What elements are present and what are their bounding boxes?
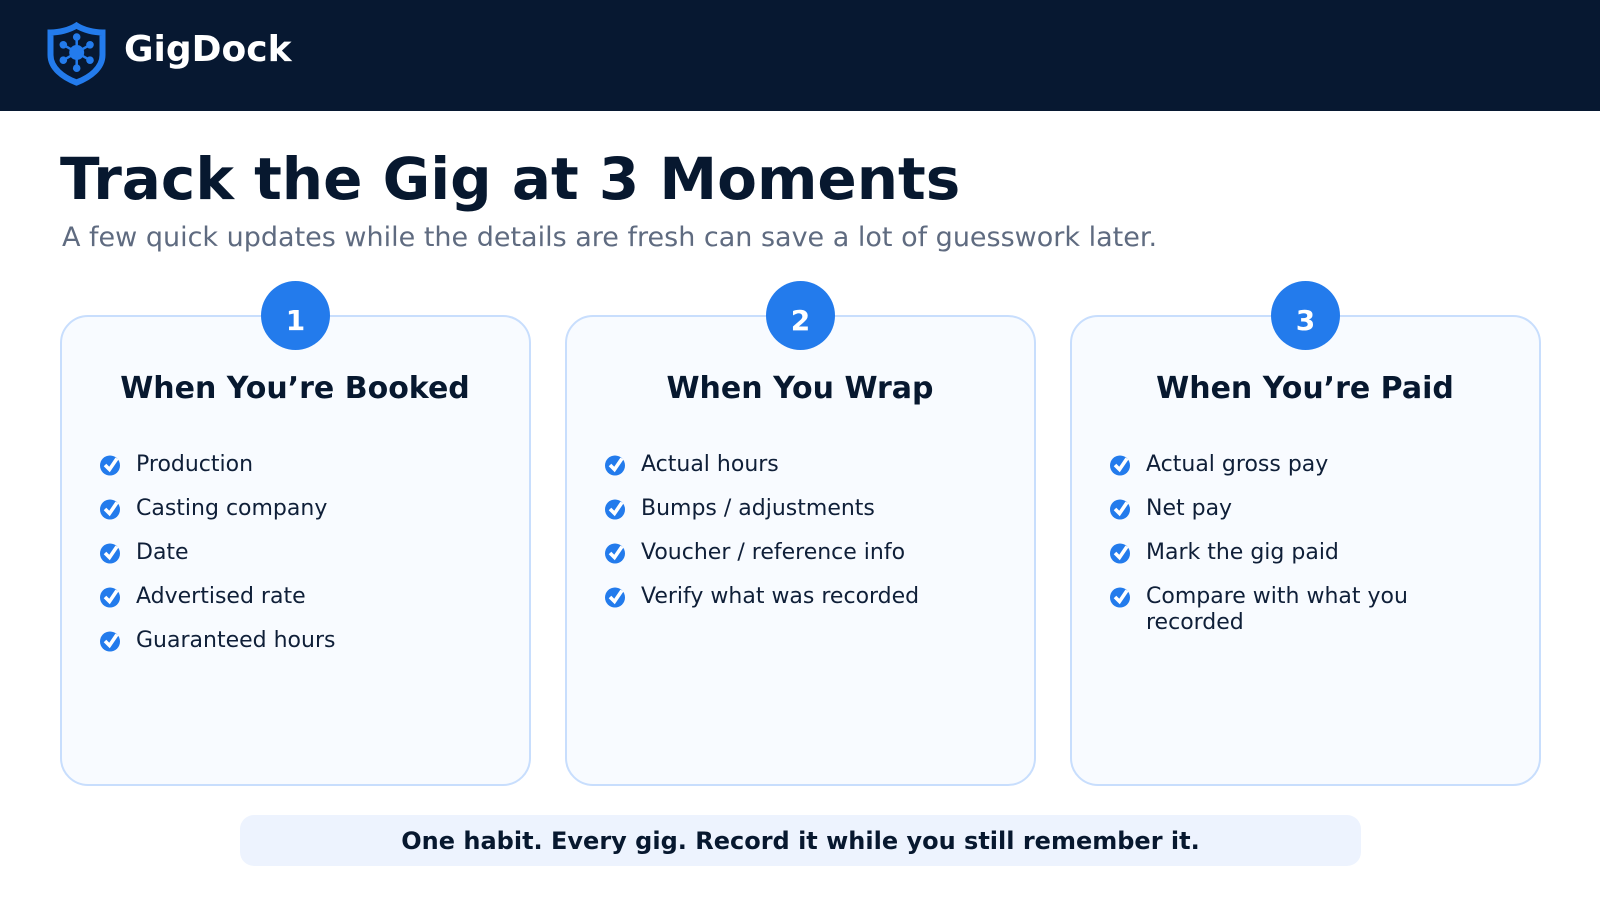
icon: check [605, 588, 625, 608]
icon: check [1110, 544, 1130, 564]
card background [1070, 315, 1541, 786]
item: Casting company [136, 496, 327, 521]
item: Date [136, 540, 189, 565]
item: Actual gross pay [1146, 452, 1328, 477]
step number 1 [261, 281, 330, 350]
header bar [0, 0, 1600, 111]
callout banner [240, 815, 1361, 866]
subtitle: A few quick updates while the details are fresh can save a lot of guesswork later. [62, 222, 1157, 253]
item: recorded [1146, 610, 1244, 635]
card background [60, 315, 531, 786]
icon: check [100, 632, 120, 652]
icon: check [1110, 456, 1130, 476]
item: Advertised rate [136, 584, 306, 609]
icon: check [1110, 588, 1130, 608]
icon: check [100, 588, 120, 608]
icon: check [605, 456, 625, 476]
item: Net pay [1146, 496, 1232, 521]
step number 2 [766, 281, 835, 350]
item: Verify what was recorded [641, 584, 919, 609]
step number 3 [1271, 281, 1340, 350]
panel: when paid [1070, 281, 1541, 786]
item: Compare with what you [1146, 584, 1408, 609]
item: Guaranteed hours [136, 628, 335, 653]
icon: check [1110, 500, 1130, 520]
icon: check [605, 500, 625, 520]
step number 3: 3 [1296, 304, 1315, 337]
item [1146, 584, 1408, 635]
icon: check [100, 456, 120, 476]
heading: When You’re Paid [1156, 371, 1454, 406]
panel: when wrap [565, 281, 1036, 786]
icon: shield logo [48, 22, 106, 86]
item: Actual hours [641, 452, 779, 477]
panel: when booked [60, 281, 531, 786]
checklist [100, 452, 335, 653]
step number 2: 2 [791, 304, 810, 337]
callout banner: One habit. Every gig. Record it while you still remember it. [401, 827, 1200, 855]
checklist [1110, 452, 1408, 635]
card background [565, 315, 1036, 786]
heading: When You Wrap [666, 371, 934, 406]
step number 1: 1 [286, 304, 305, 337]
item: Voucher / reference info [641, 540, 905, 565]
heading: When You’re Booked [120, 371, 470, 406]
item: Mark the gig paid [1146, 540, 1339, 565]
item: Bumps / adjustments [641, 496, 875, 521]
item: Production [136, 452, 253, 477]
title: Track the Gig at 3 Moments [60, 145, 960, 213]
icon: check [605, 544, 625, 564]
brand name: GigDock [124, 29, 292, 70]
icon: check [100, 500, 120, 520]
icon: check [100, 544, 120, 564]
checklist [605, 452, 919, 609]
